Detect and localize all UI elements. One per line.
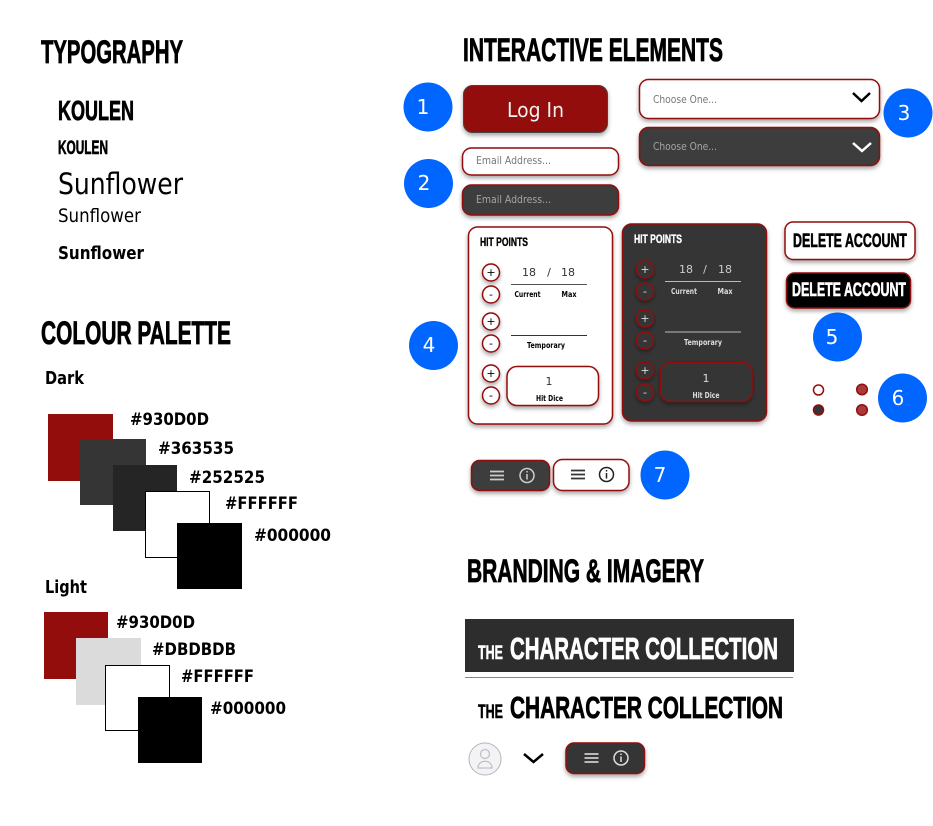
swatch: 252525 — [113, 465, 177, 531]
label: light: Light — [45, 577, 87, 598]
sample: Koulen large: KOULEN — [58, 95, 134, 126]
hex labels: light: #DBDBDB — [152, 640, 236, 660]
button: delete account light — [785, 222, 915, 260]
stepper symbols — [486, 266, 496, 402]
logo: light: CHARACTER COLLECTION — [510, 690, 783, 725]
input: email light: Email Address... — [476, 154, 551, 167]
icon: chevron — [524, 754, 543, 762]
stepper symbols: + — [640, 263, 650, 276]
panel: hit points dark — [622, 224, 766, 421]
marker 7 — [640, 450, 690, 500]
stepper symbols: - — [643, 285, 647, 298]
stepper symbols: + — [640, 364, 650, 377]
stepper symbols: + — [486, 315, 496, 328]
stepper symbols: + — [486, 367, 496, 380]
swatch: 000000 — [138, 697, 202, 763]
marker 7: 7 — [654, 463, 666, 487]
temporary field: Temporary — [527, 341, 566, 350]
select: light — [640, 80, 880, 118]
stepper symbols: + — [486, 266, 496, 279]
hit dice box: Hit Dice — [536, 394, 563, 403]
logo: light — [478, 690, 783, 725]
button: log in — [464, 86, 608, 132]
hit point values: / — [547, 266, 551, 279]
toggle: brand header — [566, 743, 644, 774]
hex labels: dark: #363535 — [158, 439, 234, 459]
sample: Koulen small: KOULEN — [58, 138, 108, 159]
hit point values — [679, 263, 732, 276]
label: dark: Dark — [45, 368, 85, 389]
swatch: 930D0D — [44, 612, 108, 679]
heading: typography: TYPOGRAPHY — [41, 34, 183, 70]
swatch: 930D0D — [48, 414, 113, 481]
panel heading: HIT POINTS — [634, 232, 682, 246]
sample: Sunflower bold: Sunflower — [58, 243, 144, 264]
panel heading: HIT POINTS — [480, 235, 528, 249]
current and max fields: Max — [562, 290, 577, 299]
current and max fields: Max — [718, 287, 733, 296]
swatch: FFFFFF — [146, 492, 210, 558]
heading: branding and imagery: BRANDING & IMAGERY — [467, 553, 704, 589]
stepper symbols: - — [643, 386, 647, 399]
marker 3 — [884, 88, 932, 138]
hex labels: dark: #930D0D — [130, 410, 209, 430]
panel: hit points light — [468, 227, 612, 424]
marker 5 — [813, 312, 862, 362]
hit dice box: 1 — [546, 375, 552, 388]
current and max fields — [665, 282, 741, 296]
stepper symbols: - — [489, 288, 493, 301]
hit point values: 18 — [679, 263, 693, 276]
hex labels: light: #930D0D — [116, 613, 195, 633]
input: email dark — [462, 185, 618, 215]
swatch: 363535 — [80, 439, 146, 505]
hex labels: light — [116, 613, 286, 719]
temporary field: Temporary — [684, 338, 723, 347]
select: light: Choose One... — [653, 93, 717, 106]
current and max fields: Current — [514, 290, 541, 299]
select: dark: Choose One... — [653, 140, 717, 153]
stepper buttons — [636, 261, 654, 401]
button: delete account dark — [786, 273, 910, 308]
input: email light — [462, 148, 618, 175]
marker 6 — [878, 374, 927, 422]
typography samples — [58, 95, 183, 264]
swatch: FFFFFF — [106, 666, 170, 730]
hit point values: 18 — [718, 263, 732, 276]
input: email dark: Email Address... — [476, 193, 551, 206]
marker 2 — [404, 159, 453, 208]
marker 4: 4 — [423, 333, 435, 357]
palette: dark — [45, 368, 331, 589]
toggle: dark — [472, 460, 550, 490]
hit point values: / — [703, 263, 707, 276]
current and max fields: Current — [671, 287, 697, 296]
logo: dark banner — [465, 619, 794, 672]
hit point values — [522, 266, 575, 279]
hit dice box — [507, 366, 598, 406]
marker 1: 1 — [417, 95, 429, 119]
stepper symbols: + — [640, 312, 650, 325]
marker 3: 3 — [898, 101, 910, 125]
hit dice box: Hit Dice — [692, 391, 720, 400]
hex labels: light: #000000 — [210, 699, 286, 719]
button: log in: Log In — [507, 98, 564, 122]
hit point values: 18 — [561, 266, 575, 279]
hex labels: dark — [130, 410, 331, 546]
hit dice box — [660, 362, 752, 402]
marker 4 — [409, 321, 458, 370]
heading: colour palette: COLOUR PALETTE — [41, 315, 231, 351]
stepper symbols: - — [643, 334, 647, 347]
hex labels: dark: #FFFFFF — [225, 494, 298, 514]
stepper buttons — [482, 264, 500, 404]
hex labels: dark: #000000 — [254, 526, 331, 546]
swatch: 000000 — [177, 523, 242, 589]
swatch: DBDBDB — [76, 638, 141, 705]
marker 1 — [404, 82, 452, 132]
toggle: light — [554, 460, 629, 490]
current and max fields — [511, 284, 587, 299]
hit dice box: 1 — [702, 372, 710, 385]
marker 5: 5 — [826, 325, 838, 349]
stepper symbols: - — [489, 389, 493, 402]
heading: interactive elements: INTERACTIVE ELEMENTS — [463, 32, 723, 68]
logo: dark banner: THE — [478, 643, 503, 664]
stepper symbols: - — [489, 337, 493, 350]
icon: user avatar — [469, 743, 501, 775]
sample: Sunflower large: Sunflower — [58, 167, 183, 201]
logo: light: THE — [478, 702, 503, 723]
marker 2: 2 — [418, 171, 430, 195]
marker 6: 6 — [892, 386, 904, 410]
temporary field — [665, 332, 741, 347]
stepper symbols — [640, 263, 650, 399]
temporary field — [511, 336, 587, 350]
radio buttons — [814, 384, 867, 415]
palette: light — [44, 577, 286, 763]
select: dark — [640, 128, 880, 166]
hex labels: light: #FFFFFF — [181, 667, 254, 687]
hex labels: dark: #252525 — [189, 468, 265, 488]
sample: Sunflower small: Sunflower — [58, 205, 141, 227]
logo: dark banner: CHARACTER COLLECTION — [510, 631, 778, 666]
hit point values: 18 — [522, 266, 536, 279]
